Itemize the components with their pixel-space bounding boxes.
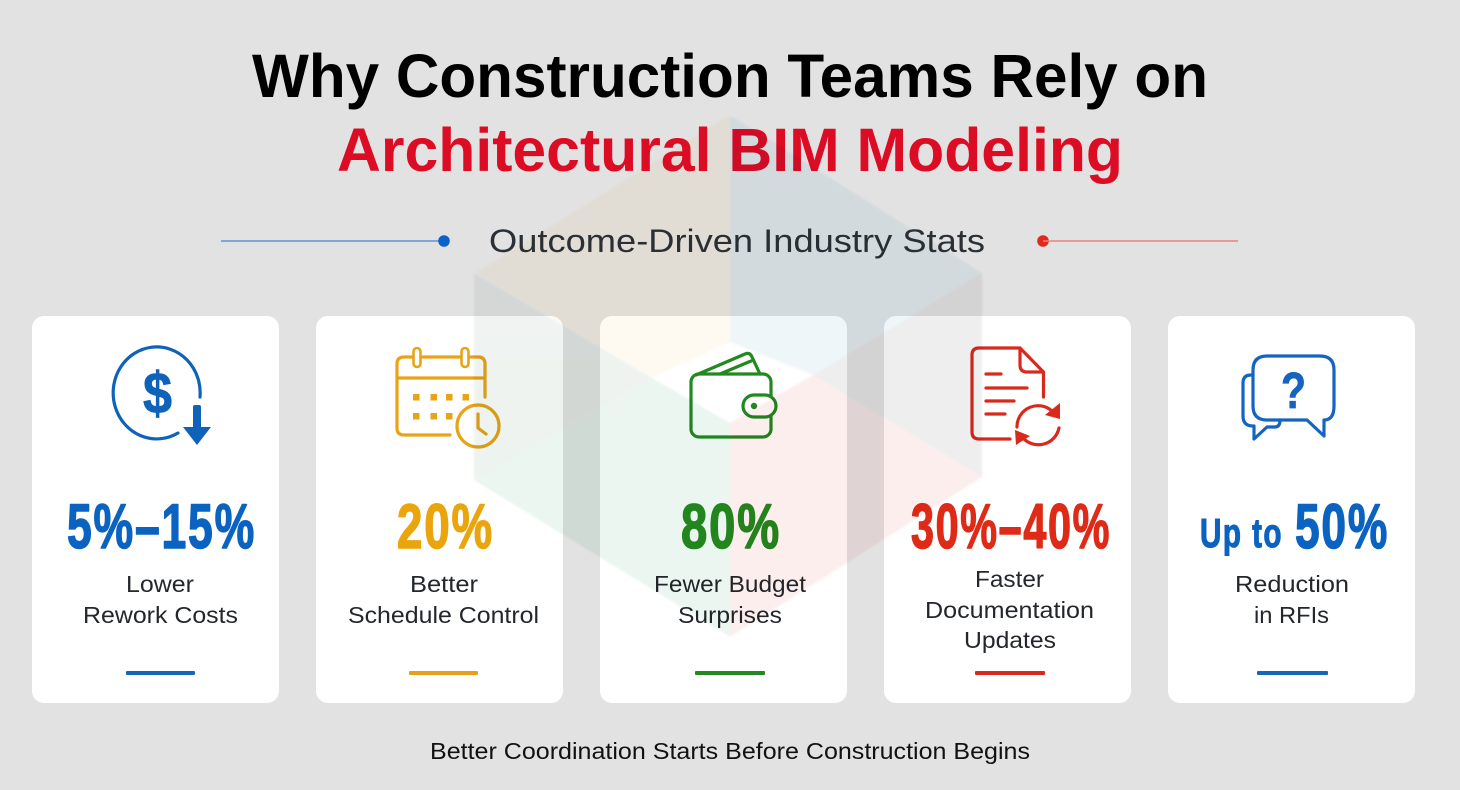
label: Rework Costs xyxy=(83,602,238,628)
footer text: Better Coordination Starts Before Construction Begins xyxy=(430,738,1030,764)
label xyxy=(83,571,238,628)
accent bar xyxy=(695,671,765,675)
label: Surprises xyxy=(678,602,782,628)
label: Faster xyxy=(975,566,1044,592)
label xyxy=(348,571,539,628)
stat: 20% xyxy=(397,492,494,562)
watermark: BIM hexagon logo xyxy=(474,116,982,637)
stat: 30%–40% xyxy=(911,492,1111,562)
subtitle with divider lines xyxy=(221,223,1238,259)
accent bar xyxy=(1257,671,1328,675)
panel: lower rework costs xyxy=(32,316,279,703)
label: in RFIs xyxy=(1254,602,1329,628)
panel: fewer budget surprises xyxy=(600,316,847,703)
label: Updates xyxy=(964,627,1056,653)
title: Architectural BIM Modeling xyxy=(337,116,1123,184)
label xyxy=(654,571,806,628)
stat: 80% xyxy=(681,492,781,562)
panel: reduction in RFIs xyxy=(1168,316,1415,703)
label: Reduction xyxy=(1235,571,1349,597)
icon: speech bubbles with question mark: ? xyxy=(1281,362,1306,419)
icon: calendar with clock xyxy=(397,348,499,447)
title: Why Construction Teams Rely on xyxy=(252,42,1208,110)
panel: faster documentation updates xyxy=(884,316,1131,703)
panel: better schedule control xyxy=(316,316,563,703)
stat xyxy=(1200,492,1389,562)
label: Fewer Budget xyxy=(654,571,806,597)
accent bar xyxy=(126,671,195,675)
label: Better xyxy=(410,571,478,597)
label xyxy=(1235,571,1349,628)
icon: dollar with down arrow: $ xyxy=(143,361,172,426)
label: Documentation xyxy=(925,597,1094,623)
label xyxy=(925,566,1094,653)
subtitle with divider lines: Outcome-Driven Industry Stats xyxy=(489,223,985,259)
label: Lower xyxy=(126,571,194,597)
title xyxy=(252,42,1208,184)
icon: dollar with down arrow xyxy=(113,347,211,445)
icon: speech bubbles with question mark xyxy=(1243,356,1334,439)
icon: document with sync arrows xyxy=(972,348,1060,445)
icon: wallet xyxy=(691,353,776,437)
accent bar xyxy=(409,671,478,675)
accent bar xyxy=(975,671,1045,675)
label: Schedule Control xyxy=(348,602,539,628)
stat: 5%–15% xyxy=(67,492,256,562)
stat: Up to xyxy=(1200,510,1283,556)
stat: 50% xyxy=(1295,492,1389,562)
